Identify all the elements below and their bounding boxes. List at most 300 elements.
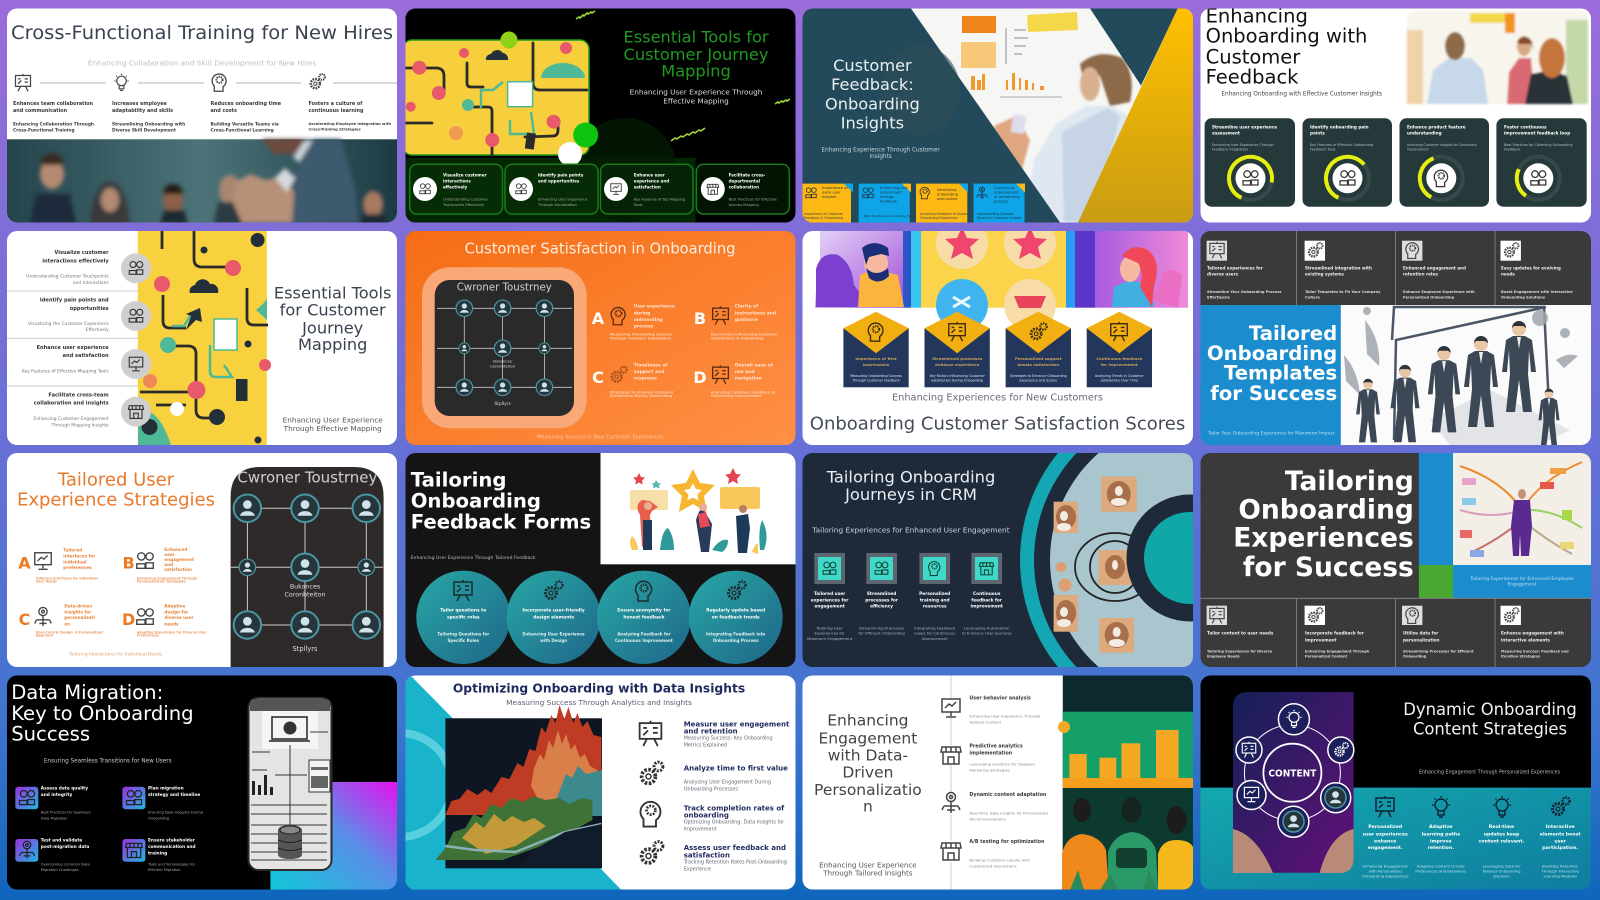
- column 4: Measuring Success: Feedback and: [1501, 650, 1569, 654]
- title: Cross-Functional Training for New Hires: [11, 22, 393, 44]
- image: arcs and blocks: [1020, 390, 1360, 730]
- card 4: [1496, 118, 1587, 208]
- framed network image: Bukances: [493, 358, 512, 363]
- sketch: notes and man: [961, 12, 1132, 222]
- box: pain points: [916, 184, 970, 223]
- column 1: [1207, 241, 1281, 299]
- card 4: Satisfaction Over Time: [1101, 379, 1138, 383]
- illustration: journey map: [403, 40, 589, 166]
- box: early insights: Feedback in Onboarding: [804, 216, 843, 220]
- card 3: Experience and Scores: [1019, 379, 1057, 383]
- card 2: Satisfaction During Onboarding: [931, 379, 983, 383]
- title: Journeys in CRM: [844, 485, 977, 504]
- subtitle: Ensuring Seamless Transitions for New Users: [44, 758, 172, 764]
- column 3: Enhance Employee Experience with: [1403, 290, 1475, 294]
- title: Feedback: [1206, 65, 1299, 88]
- card 1: Measuring Onboarding Success: [850, 374, 902, 378]
- column 1: user experiences: [1363, 831, 1408, 837]
- circle 3: Analyzing Feedback for: [617, 632, 671, 637]
- item 4: Enhancing Customer Engagement: [34, 417, 109, 422]
- illustration: yellow journey map: [138, 231, 271, 445]
- column 2: [1415, 796, 1466, 873]
- circle 2: design elements: [533, 614, 574, 620]
- item 4: Through Mapping Insights: [51, 422, 109, 428]
- title: Personalizatio: [814, 781, 922, 799]
- item C: personalizati: [64, 615, 96, 620]
- step 2: [858, 553, 905, 635]
- item A: process: [634, 323, 654, 329]
- column 3: Enhanced engagement and: [1403, 265, 1466, 270]
- title: Data Migration:: [11, 681, 163, 704]
- column 1: Tailoring Experiences for Diverse: [1207, 650, 1272, 654]
- card 4: improvement feedback loop: [1504, 130, 1570, 135]
- item 4: collaboration and insights: [34, 400, 109, 406]
- card 1: Enhancing User Experience Through: [1212, 143, 1274, 147]
- item A: A: [592, 309, 605, 328]
- column 2: retention.: [1428, 845, 1454, 851]
- panel: Dynamic Onboarding Content Strategies: [1200, 676, 1592, 890]
- box: assessment: feedback: [880, 200, 898, 204]
- item 3: Track completion rates of: [684, 804, 784, 812]
- item B: Satisfaction in Onboarding: [711, 336, 764, 340]
- item 1: Visualize customer: [54, 250, 109, 256]
- illustration: people and star ratings: [815, 217, 1188, 331]
- circle 3: Continuous Improvement: [615, 638, 673, 643]
- item B: B: [694, 309, 706, 328]
- subtitle: Through Effective Mapping: [283, 424, 382, 433]
- card 1: Feedback Integration: [1212, 148, 1248, 152]
- item 1: [26, 250, 151, 286]
- box 4: collaboration: [729, 185, 759, 190]
- title: for Customer: [280, 301, 386, 320]
- item B: Enhancing Engagement Through: [137, 576, 197, 580]
- item A: interfaces for: [63, 553, 96, 558]
- column 3: [1402, 606, 1474, 659]
- title: Essential Tools: [274, 283, 392, 302]
- column 3: Tailored Onboarding: [1481, 868, 1521, 873]
- item 3: Real-Time Data Insights for Personalized: [969, 810, 1048, 815]
- step 3: Integrating Feedback: [914, 625, 955, 630]
- item 1: [15, 786, 91, 820]
- title: Tailoring Onboarding: [827, 467, 995, 486]
- image: mind map: [1453, 453, 1592, 565]
- column 2: Adaptive: [1429, 825, 1453, 830]
- blue title block: for Success: [1210, 382, 1337, 405]
- column 1: [1362, 796, 1409, 879]
- caption: Tailoring Experiences for Enhanced Employee: [1470, 577, 1574, 582]
- circle 3: [597, 571, 691, 664]
- title: Dynamic Onboarding: [1403, 700, 1577, 719]
- title: Onboarding with: [1206, 25, 1367, 48]
- card 4: [1087, 312, 1152, 387]
- item C: on: [64, 622, 70, 627]
- item 2: opportunities: [70, 306, 109, 312]
- column 4: [1500, 606, 1569, 659]
- box 1: interactions: [443, 179, 471, 184]
- box 3: satisfaction: [634, 185, 661, 190]
- box 2: Enhancing User Experience: [538, 198, 587, 202]
- column 1: Effortlessly: [1207, 295, 1231, 299]
- panel: Tailoring Onboarding Journeys in CRM: [802, 390, 1360, 730]
- title: Mapping: [661, 62, 731, 81]
- step 1: engagement: [814, 604, 845, 610]
- box 4: departmental: [729, 179, 761, 184]
- illustration: star feedback: [600, 453, 796, 564]
- item A: User Needs: [36, 580, 57, 584]
- item D: D: [122, 610, 135, 629]
- column 4: needs: [1501, 272, 1515, 277]
- column 3: Streamlining Processes for Efficient: [1403, 650, 1474, 654]
- item 3: Improvement: [684, 826, 717, 832]
- item 3: [938, 792, 1048, 822]
- item 2: Diverse Skill Development: [112, 127, 176, 133]
- box 3: experience and: [634, 179, 669, 184]
- box: assessment: [859, 184, 922, 223]
- item 1: Enhances team collaboration: [13, 101, 93, 107]
- item 3: [22, 345, 151, 379]
- title: n: [863, 798, 873, 816]
- step 4: [962, 553, 1012, 635]
- column 1: Employee Needs: [1207, 655, 1240, 659]
- column 3: [1479, 796, 1525, 879]
- item 1: Best Practices for Seamless: [41, 811, 91, 815]
- box 1: effectively: [443, 185, 468, 190]
- panel: Customer Feedback Onboarding Insights: [802, 8, 1194, 223]
- card 4: Continuous feedback: [1096, 356, 1142, 361]
- item 3: Optimizing Onboarding: Data Insights for: [684, 819, 784, 825]
- caption: Engagement: [1507, 582, 1537, 588]
- panel: Essential Tools dark: [403, 8, 796, 223]
- column 3: [1402, 241, 1475, 299]
- card 3: understanding: [1407, 130, 1442, 135]
- item 2: Identify pain points and: [40, 298, 109, 304]
- item 3: Cross-Functional Learning: [210, 127, 274, 133]
- circle 4: on feedback trends: [712, 614, 760, 620]
- subtitle: Enhancing User Experience Through Tailored Feedback: [411, 555, 536, 561]
- item D: diverse user: [164, 615, 194, 620]
- title: Onboarding Customer Satisfaction Scores: [810, 413, 1185, 434]
- item 2: Onboarding Processes: [684, 787, 738, 793]
- card 2: Key Features of Effective Onboarding: [1310, 143, 1373, 147]
- item 4: [122, 838, 196, 872]
- box: assessment: assessment: [880, 190, 902, 194]
- box: pain points: onboarding: [937, 192, 958, 196]
- item A: preferences: [63, 565, 92, 570]
- item A: [592, 304, 675, 340]
- item 1: Measure user engagement: [684, 721, 789, 729]
- card 4: for improvement: [1101, 362, 1138, 367]
- column 1: enhance: [1374, 838, 1396, 844]
- circle 1: Specific Roles: [448, 638, 480, 643]
- column 1: with Personalized: [1369, 868, 1402, 873]
- item 1: Data Migration: [41, 816, 67, 820]
- framed network image: Cwroner Toustrney: [457, 283, 552, 294]
- subtitle: Enhancing Experience Through Customer: [822, 148, 940, 154]
- item 2: Analyze time to first value: [684, 765, 788, 773]
- item 1: and communication: [13, 108, 68, 114]
- column 4: elements boost: [1540, 831, 1581, 837]
- item 2: [122, 786, 203, 820]
- subtitle: Enhancing Onboarding with Effective Customer Insights: [1221, 91, 1382, 97]
- panel: Enhancing Onboarding with Customer Feedback: [1200, 5, 1592, 223]
- card 2: Streamlined processes: [932, 356, 982, 361]
- step 4: Leveraging Automation: [964, 625, 1009, 630]
- item 4: Facilitate cross-team: [48, 392, 109, 398]
- card 3: Strategies to Enhance Onboarding: [1010, 374, 1067, 378]
- item 1: [938, 695, 1041, 724]
- box 1: Understanding Customer: [443, 198, 488, 202]
- framed network image: [422, 267, 587, 428]
- item C: Timeliness of: [634, 363, 667, 368]
- title: Customer Journey: [624, 45, 769, 64]
- item 3: onboarding: [684, 812, 729, 820]
- item A: [18, 548, 98, 584]
- item A: Tailoring Interfaces for Individual: [36, 576, 98, 580]
- image: data mountains: [435, 705, 602, 868]
- item D: [693, 362, 776, 398]
- title: Feedback:: [831, 75, 914, 94]
- box: continuous improvement: Implementing Changes: [977, 212, 1014, 216]
- box: pain points: pain points: [937, 197, 958, 201]
- card 1: Streamline user experience: [1212, 124, 1277, 129]
- item 2: Marketing Strategies: [969, 768, 1010, 773]
- network image: Bukances: [290, 583, 320, 590]
- blue title block: Templates: [1224, 361, 1337, 384]
- column 2: [1305, 606, 1370, 659]
- item 3: Reduces onboarding time: [210, 101, 281, 107]
- card 3: Enhance product feature: [1407, 124, 1466, 129]
- step 1: Tailored user: [814, 592, 845, 597]
- column 2: Enhancing Engagement Through: [1305, 650, 1369, 654]
- circle 3: honest feedback: [623, 614, 665, 620]
- title: Customer: [833, 56, 912, 75]
- item 3: Overcoming Common Data: [41, 862, 90, 866]
- column 3: retention rates: [1403, 272, 1438, 277]
- item 2: Ensuring Data Integrity During: [148, 811, 203, 815]
- box: continuous improvement: Based on Customer Insights: [977, 216, 1022, 220]
- item 2: Streamlining Onboarding with: [112, 122, 185, 127]
- item C: Approach: [36, 634, 54, 638]
- box: assessment: Enhancing and: [880, 186, 907, 190]
- item 1: User behavior analysis: [969, 695, 1031, 701]
- item 3: Recommendations: [969, 817, 1006, 822]
- card 2: Identify onboarding pain: [1310, 124, 1369, 129]
- column 3: content relevant.: [1479, 838, 1525, 844]
- item 4: training: [148, 850, 167, 856]
- box: continuous improvement: improvement: [994, 190, 1019, 194]
- title: Driven: [842, 764, 893, 782]
- box 1: Touchpoints Effectively: [442, 203, 485, 207]
- panel: Data-Driven Personalization: [802, 675, 1194, 890]
- box: early insights: early user: [822, 190, 841, 194]
- column 4: Interactive: [1546, 825, 1575, 830]
- item 4: Assess user feedback and: [684, 844, 786, 852]
- box 2: Identify pain points: [538, 173, 583, 178]
- column 3: personalization: [1403, 638, 1440, 643]
- column 1: Onboarding Experiences: [1362, 874, 1409, 879]
- column 4: interactive elements: [1501, 638, 1550, 643]
- item C: C: [19, 610, 30, 629]
- card 1: Through Customer Feedback: [851, 379, 900, 383]
- item 2: Leveraging Analytics for Targeted: [969, 762, 1035, 767]
- item 2: strategy and timeline: [148, 792, 200, 798]
- column 1: Personalized: [1368, 825, 1402, 830]
- column 3: Journeys: [1492, 874, 1510, 879]
- card 2: [1302, 118, 1392, 207]
- column 4: Boost Engagement with Interactive: [1501, 290, 1573, 294]
- box: continuous improvement: process: [994, 200, 1008, 204]
- panel: Tailored User Experience Strategies: [7, 453, 397, 667]
- item 1: Enhancing Collaboration Through: [13, 122, 94, 127]
- item C: User-Centric Design: A Personalized: [36, 631, 103, 635]
- card 3: boosts satisfaction: [1017, 362, 1059, 367]
- column 2: Personalized Content: [1305, 655, 1348, 659]
- title: Essential Tools for: [624, 27, 768, 46]
- circle 1: Tailor questions to: [440, 609, 486, 614]
- step 2: Streamlining Processes: [859, 625, 904, 630]
- item 4: Customized Interactions: [969, 864, 1017, 869]
- illustration: audience and bar chart: [1058, 675, 1194, 890]
- item 2: Analyzing User Engagement During: [684, 780, 771, 786]
- box: pain points: Analyzing Feedback to Improve: [920, 212, 970, 216]
- framed network image: Stpllyrs: [494, 401, 512, 407]
- panel: Optimizing Onboarding with Data Insights: [400, 676, 796, 890]
- box 3: Enhance user: [634, 173, 665, 178]
- item B: engagement: [164, 557, 194, 562]
- step 3: resources: [923, 604, 947, 610]
- title: for Success: [1243, 552, 1414, 583]
- panel: Cross-Functional Training: [7, 8, 397, 224]
- item A: during: [634, 310, 650, 316]
- title: Success: [11, 723, 90, 746]
- column 1: engagement.: [1368, 845, 1403, 851]
- title: Insights: [841, 113, 904, 132]
- network image: Stpllyrs: [292, 645, 318, 653]
- item 4: Fosters a culture of: [308, 101, 362, 107]
- item 1: [13, 74, 94, 133]
- box: assessment: through: [880, 195, 895, 199]
- step 2: efficiency: [870, 604, 893, 610]
- title: Journey: [301, 318, 364, 337]
- title: Content Strategies: [1413, 719, 1567, 738]
- title: Customer Satisfaction in Onboarding: [465, 240, 735, 257]
- card 2: Key Factors Influencing Customer: [930, 374, 985, 378]
- item B: user: [164, 552, 176, 557]
- item 1: Enhancing User Experience Through: [969, 713, 1040, 718]
- item 1: Tailored Content: [968, 719, 1002, 724]
- step 4: Continuous: [973, 592, 1000, 597]
- box 4: Best Practices for Effective: [729, 198, 777, 202]
- card 4: Best Practices for Collecting Onboarding: [1504, 143, 1572, 147]
- item 4: [642, 842, 787, 872]
- box 4: [696, 164, 789, 214]
- item 1: [640, 721, 790, 748]
- column 3: updates keep: [1484, 831, 1520, 837]
- box 2: Through Visualization: [537, 203, 577, 207]
- blue title block: Tailored: [1249, 322, 1337, 345]
- subtitle: Through Tailored Insights: [822, 869, 913, 878]
- title: Enhancing: [1206, 5, 1308, 28]
- blue title block: [1200, 305, 1341, 445]
- item B: [694, 304, 777, 340]
- item 2: Predictive analytics: [969, 745, 1023, 750]
- step 1: Experiences for: [814, 630, 845, 635]
- column 2: [1305, 241, 1381, 299]
- step 3: [914, 553, 956, 641]
- card 1: assessment: [1212, 130, 1240, 135]
- decorative circles: [500, 32, 598, 148]
- item A: User experience: [634, 305, 675, 310]
- box 2: [505, 164, 598, 214]
- subtitle: Effective Mapping: [663, 96, 729, 105]
- item B: guidance: [735, 317, 758, 323]
- column 4: participation.: [1542, 845, 1578, 851]
- column 4: Through Interactive: [1540, 868, 1580, 873]
- title: Tailoring: [1285, 466, 1414, 497]
- item 2: Effectively: [86, 327, 109, 333]
- item 2: adaptability and skills: [112, 108, 173, 114]
- circle 3: Ensure anonymity for: [617, 609, 671, 614]
- column 4: Onboarding Solutions: [1501, 295, 1545, 299]
- item C: support and: [634, 369, 665, 375]
- circle 2: with Design: [540, 638, 567, 643]
- item 4: A/B testing for optimization: [969, 839, 1045, 845]
- item 3: Dynamic content adaptation: [969, 792, 1047, 798]
- title: Onboarding: [1238, 494, 1414, 525]
- item 3: Building Versatile Teams via: [210, 122, 279, 127]
- item C: C: [592, 368, 604, 387]
- network image: Coronbteiton: [285, 592, 325, 599]
- shape: gold wedge: [1078, 8, 1194, 222]
- circle 1: [416, 571, 510, 664]
- title: Customer: [1206, 45, 1301, 68]
- column 1: Enhancing Engagement: [1363, 864, 1408, 869]
- card 4: Analyzing Trends in Customer: [1095, 374, 1144, 378]
- subtitle: Insights: [869, 154, 892, 160]
- step 4: to Enhance User Journeys: [962, 630, 1012, 635]
- column 4: Learning Modules: [1543, 874, 1577, 879]
- shape: teal triangles: [802, 8, 1178, 222]
- framed network image: Coronbteiton: [490, 364, 516, 369]
- subtitle: Enhancing Collaboration and Skill Development for New Hires: [88, 59, 316, 68]
- photo: watercolor team: [1407, 11, 1588, 104]
- item D: navigation: [735, 375, 762, 381]
- box: assessment: Best Practices for Collecting Feedback: [864, 214, 922, 218]
- step 3: training and: [920, 597, 950, 603]
- circle 4: [689, 571, 783, 664]
- item 3: and satisfaction: [63, 353, 109, 359]
- item 3: post-migration data: [41, 844, 89, 850]
- item 3: [15, 838, 90, 872]
- title: Onboarding: [825, 94, 920, 113]
- item B: B: [122, 553, 135, 572]
- step 3: Personalized: [919, 592, 950, 597]
- network image: [230, 467, 384, 667]
- item D: [122, 603, 207, 638]
- blue title block: Onboarding: [1207, 342, 1337, 365]
- item B: and: [164, 562, 173, 567]
- item 2: Visualizing the Customer Experience: [28, 322, 109, 327]
- column 3: Real-time: [1489, 825, 1514, 830]
- card 4: Feedback: [1504, 148, 1520, 152]
- card 2: [924, 312, 990, 387]
- box: pain points: Identifying: [937, 188, 957, 192]
- box: early insights: Importance of: [822, 186, 848, 190]
- title: Experience Strategies: [17, 489, 215, 510]
- card 3: [1006, 312, 1071, 387]
- item C: Satisfaction During Onboarding: [610, 394, 673, 398]
- item 1: and retention: [684, 728, 738, 736]
